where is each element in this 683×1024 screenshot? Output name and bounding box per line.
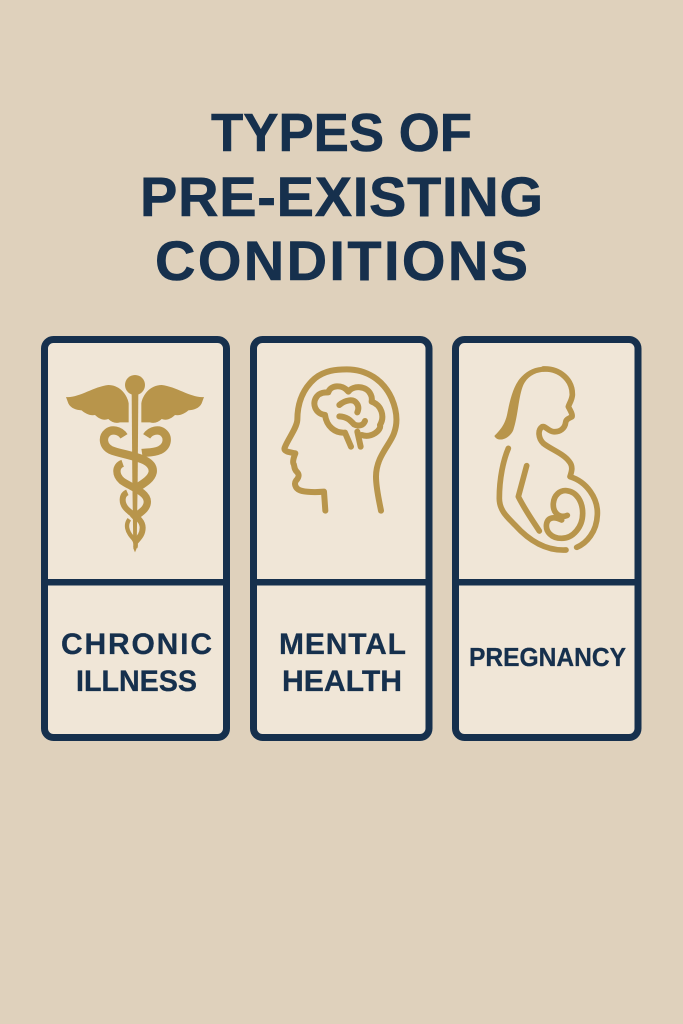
title: TYPES OF [211,103,472,163]
title: CONDITIONS [155,229,528,292]
panel: mental health [253,340,430,738]
label: chronic illness [61,628,212,698]
title [140,103,543,292]
card frame: mental health [254,340,429,738]
card frame: pregnancy [456,340,638,738]
divider: chronic illness [44,579,227,586]
icon: pregnant woman [494,367,597,550]
label: pregnancy: PREGNANCY [469,644,626,672]
label: chronic illness: ILLNESS [76,665,197,698]
label: mental health [279,628,406,698]
icon: caduceus [66,375,204,552]
panel: chronic illness [44,340,227,738]
panel: pregnancy [455,340,639,738]
label: chronic illness: CHRONIC [61,628,212,661]
card frame: chronic illness [44,340,226,738]
icon: head with brain [284,369,396,511]
title: PRE-EXISTING [140,165,543,228]
divider: pregnancy [455,579,639,586]
label: mental health: MENTAL [279,628,406,661]
divider: mental health [253,579,430,586]
label: mental health: HEALTH [282,665,402,698]
